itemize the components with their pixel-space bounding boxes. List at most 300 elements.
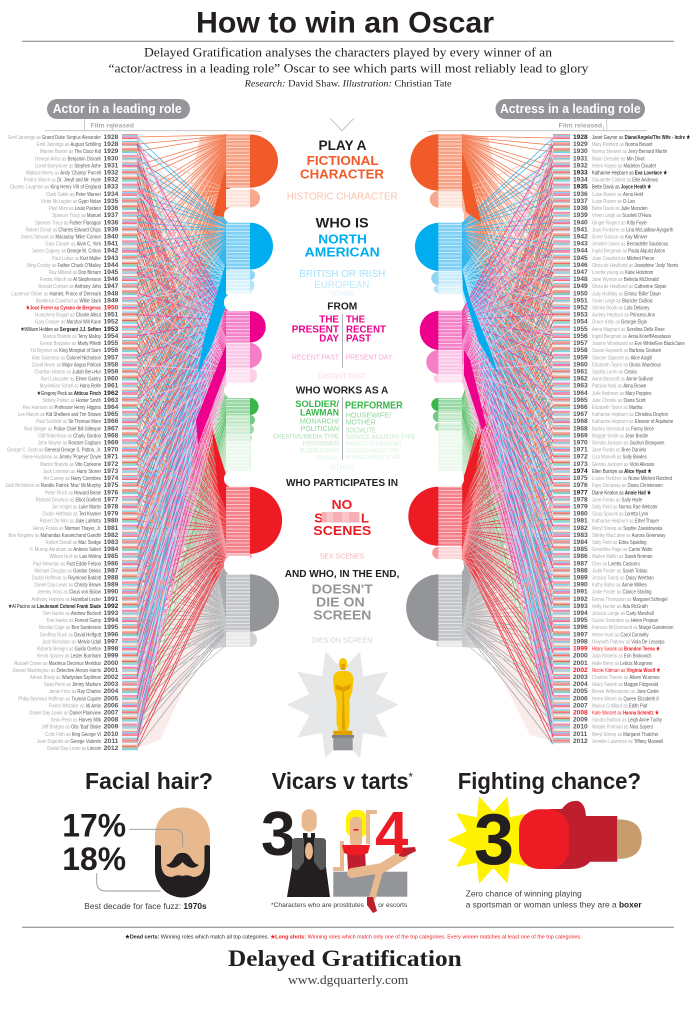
actor years [104,134,119,752]
actor years: 1992 [104,603,119,610]
actor names: ★Gregory Peck as Atticus Finch [37,390,101,397]
actor names: Spencer Tracy as Father Flanagan [35,220,101,227]
actor names: Kevin Spacey as Lester Burnham [37,653,101,660]
category: era [292,302,392,381]
actress names: Norma Shearer as Jerry Bernard Martin [592,149,667,155]
category: north american: WHO IS [316,216,369,231]
actor names: Cliff Robertson as Charly Gordon [38,433,101,440]
actress years: 2001 [573,660,588,667]
actress names: Emma Thompson as Margaret Schlegel [592,596,667,603]
actor years: 1974 [104,475,119,482]
actress years: 1983 [573,532,588,539]
category: era: THE [346,315,365,326]
category: occupation: HOUSEWIFE/ [346,411,392,420]
actress names: Luise Rainer as O-Lan [592,198,635,205]
actress years: 2008 [573,710,588,716]
actor names: Warner Baxter as The Cisco Kid [40,149,101,155]
actress names: Ellen Burstyn as Alice Hyatt ★ [592,468,652,475]
actor years: 1940 [104,234,119,240]
actress names: Simone Signoret as Alice Aisgill [592,355,652,362]
actor names: Spencer Tracy as Manuel [52,213,101,219]
actress years: 1936 [573,191,588,198]
actress names: Cher as Loretta Castorini [592,561,640,568]
actress names: Kate Winslet as Hanna Schmitz ★ [592,710,659,717]
actor names: Jon Voight as Luke Martin [52,504,101,511]
icon: yellow burst [447,796,539,884]
actor names: Rod Steiger as Police Chief Bill Gillespie [24,426,101,433]
actress years: 1980 [573,511,588,518]
actress years: 1969 [573,432,588,439]
category: north american: OTHER [331,292,355,298]
actress years: 1947 [573,269,588,276]
actress names: Natalie Portman as Nina Sayers [592,724,653,731]
actor years: 1971 [104,454,119,461]
panel: vicars v tarts [261,768,416,913]
category: north american: AMERICAN [305,244,380,259]
category: fictional character: HISTORIC CHARACTER [287,192,398,203]
actress names: Ingrid Bergman as Paula Alquist Anton [592,248,665,255]
actress names [592,134,690,745]
category: survival: DIES ON SCREEN [312,636,372,645]
masthead logo: Delayed Gratification [228,946,462,971]
actor names: Wallace Beery as Andy 'Champ' Purcell [26,170,101,177]
actor names: Victor McLaglen as Gypo Nolan [41,198,101,205]
actor years: 1989 [104,582,119,589]
category: fictional character: PLAY A [318,138,367,153]
actress years: 1981 [573,518,588,525]
actor years: 1935 [104,198,119,205]
actor names: F. Murray Abraham as Antonio Salieri [30,547,101,553]
right alluvial flows [461,134,570,744]
actress years: 2004 [573,681,588,688]
actor names: Rex Harrison as Professor Henry Higgins [23,404,101,411]
actor names: Jack Nicholson as Randle Patrick 'Mac' McMurphy [5,483,101,489]
actor years: 1932 [104,177,119,184]
actress years: 1958 [573,347,588,354]
actor names: Lionel Barrymore as Stephen Ashe [35,163,101,170]
actor years: 1997 [104,638,119,646]
actress years: 1943 [573,241,588,248]
actor years: 1994 [104,617,119,624]
panel: fighting chance: Fighting chance? [458,768,641,794]
actress names: Julia Roberts as Erin Brokovich [592,653,652,660]
actor years: 1978 [104,504,119,510]
chevron [330,118,354,131]
actress years: 1986 [573,553,588,560]
category: survival: SCREEN [313,608,371,623]
actress names: Bette Davis as Julie Marsden [592,206,648,212]
actress years: 1992 [573,596,588,603]
actress names: Marie Dressler as Min Divot [592,156,645,163]
actress names: Shirley MacLaine as Aurora Greenway [592,532,666,539]
actor years: 1947 [104,283,119,290]
actress years: 1971 [573,447,588,454]
actor names: Sean Penn as Harvey Milk [50,717,101,724]
actress names: Olivia de Havilland as Catherine Sloper [592,284,667,290]
actor names: Jeremy Irons as Claus von Bülow [37,589,101,596]
actor years: 1964 [104,404,119,411]
panel: vicars v tarts: * [409,770,413,784]
icon: bearded head [155,808,210,897]
actress names: Frances McDormand as Marge Gunderson [592,625,674,631]
actor years: 1958 [104,361,119,368]
actor names: Daniel Day-Lewis as Daniel Plainview [29,710,101,717]
actor years: 1975 [104,482,119,489]
actor names: Jack Lemmon as Harry Stoner [43,468,101,475]
actor years: 1959 [104,368,119,376]
category: no sex scenes: L [361,510,369,525]
actor years: 1999 [104,653,119,660]
actor years: 1953 [104,326,119,333]
film released labels and flow arrows: Film released [559,123,602,130]
left white gaps between categories [224,132,300,662]
actress names: Shirley Booth as Lola Delaney [592,305,650,312]
actor names: Ray Milland as Don Birnam [49,269,101,276]
actress names: Mary Pickford as Norma Besant [592,142,653,148]
left heading pill: Actor in a leading role [53,102,182,116]
actor years: 2008 [104,717,119,724]
actress years: 1964 [573,390,588,397]
category: north american [299,216,385,298]
actress names: Bette Davis as Joyce Heath ★ [592,184,651,191]
actor years: 2007 [104,710,119,716]
panel: facial hair: 17% [62,808,126,844]
category: occupation: CRIMINAL [315,455,339,461]
actress names: Vivien Leigh as Scarlett O'Hara [592,213,651,219]
actress years: 1959 [573,354,588,361]
actor years: 1991 [104,596,119,603]
actor names: Maximilian Schell as Hans Rolfe [40,383,101,390]
actress years: 1940 [573,219,588,226]
actor years: 1998 [104,646,119,653]
actress names: Nicole Kidman as Virginia Woolf ★ [592,667,661,674]
actress names: Jessica Tandy as Daisy Werthan [592,575,654,582]
actress names: Halle Berry as Leticia Musgrove [592,660,653,667]
panel: vicars v tarts: 3 [261,800,295,869]
actor years: 1943 [104,255,119,262]
actress years: 1985 [573,546,588,553]
actor years: 1984 [104,546,119,553]
actor names: Denzel Washington as Detective Alonzo Harris [13,667,101,674]
actor years: 1965 [104,411,119,418]
actress names: Hilary Swank as Maggie Fitzgerald [592,682,658,688]
actor names: Ben Kingsley as Mahandas Karamchand Gandhi [9,532,101,539]
actress years: 1996 [573,624,588,631]
panel: vicars v tarts: Vicars v tarts [272,768,416,794]
left alluvial flows [122,134,230,751]
actress years: 1977 [573,489,588,496]
actor names: Bing Crosby as Father Chuck O'Malley [27,262,101,269]
actress years: 1975 [573,475,588,482]
intro text: Research: David Shaw. Illustration: Christian Tate [244,79,452,89]
actress years: 1979 [573,504,588,510]
actor names: Fredric March as Al Stephenson [40,277,101,283]
actor names: Jeff Bridges as Otis 'Bad' Blake [42,724,101,731]
actor years: 1996 [104,631,119,638]
actress names: Helen Hayes as Madelon Claudet [592,163,656,170]
category: occupation: SOCIALITE [346,427,376,434]
actor years: 1932 [104,170,119,176]
actor names: Gary Cooper as Alvin C. York [45,241,101,248]
actress names: Marlee Matlin as Sarah Norman [592,554,653,560]
actress years: 1935 [573,184,588,191]
actor years: 1979 [104,511,119,518]
actress years: 2007 [573,702,588,709]
actor years: 1963 [104,397,119,404]
actress years: 2011 [573,731,588,738]
actor names: Art Carney as Harry Coombes [44,475,101,482]
category: no sex scenes [286,477,398,560]
actress names: Katharine Hepburn as Eleanor of Aquitaine [592,419,673,425]
actor years: 1929 [104,148,119,155]
category: no sex scenes: S [314,510,323,525]
actress names: Luise Rainer as Anna Held [592,191,643,198]
actress names: Charlize Theron as Aileen Wuornos [592,674,660,681]
actor names: Forest Whitaker as Idi Amin [49,703,101,710]
intro text: Delayed Gratification analyses the characters played by every winner of an [144,46,553,60]
actor names: Dustin Hoffman as Ted Kramer [42,511,101,518]
panel: facial hair: Facial hair? [85,768,213,794]
actress years: 1982 [573,525,588,532]
actor names: Tom Hanks as Forrest Gump [46,618,101,624]
actor years: 1939 [104,226,119,233]
actor names: James Stewart as Macaulay 'Mike' Connor [20,234,101,241]
right category bands [438,134,462,648]
actor years: 1990 [104,589,119,596]
category: fictional character: CHARACTER [300,166,385,181]
actress years: 1987 [573,560,588,567]
actor years: 1987 [104,567,119,574]
actress names: Elizabeth Taylor as Gloria Wandrous [592,362,661,369]
actress years: 1942 [573,234,588,240]
right white gaps between categories [390,132,464,662]
actress names: Joan Crawford as Mildred Pierce [592,255,654,262]
actor names: Daniel Day-Lewis as Christy Brown [34,582,101,589]
actor years: 1945 [104,269,119,276]
actress years: 1984 [573,539,588,546]
actor names: Jack Nicholson as Melvin Udall [42,639,101,646]
actor years: 1995 [104,624,119,631]
actor names: Paul Muni as Louis Pasteur [49,206,101,212]
actress years: 1967 [573,411,588,418]
actress names: Reese Witherspoon as June Carter [592,689,659,695]
actor years: 1951 [104,312,119,319]
actress names: Vivien Leigh as Blanche DuBois [592,298,653,305]
actor names: Clark Gable as Peter Warner [46,191,101,198]
category: survival: DIE ON [316,594,365,609]
actor names: Ronald Colman as Anthony John [38,284,101,290]
actor names: Emil Jannings as Grand Duke Sergius Alexander [8,134,101,141]
actress years: 1968 [573,418,588,425]
category: era: RECENT PAST [292,353,339,362]
actress years: 1944 [573,248,588,255]
actress years: 1946 [573,262,588,269]
actor years: 1928 [104,141,119,148]
actress names: Joan Fontaine as Lina McLaidlaw Aysgarth [592,227,674,234]
actor years: 2004 [104,688,119,695]
category: survival: DOESN'T [312,581,373,596]
actor names: Broderick Crawford as Willie Stark [36,298,101,305]
actor years: 2005 [104,695,119,702]
actress years: 1989 [573,574,588,582]
panel: fighting chance: a sportsman or woman unless they are a boxer [466,900,642,910]
actor names: William Hurt as Luis Molina [49,554,101,560]
actress years: 1972 [573,454,588,461]
category: occupation: SOLDIER/ [295,399,340,409]
actress names: Claudette Colbert as Ellie Andrews [592,177,658,184]
category: occupation: WHO WORKS AS A [296,384,389,396]
left category bands [226,134,250,648]
icon: vicar [287,809,330,897]
category: occupation: PROSTITUTE/ESCORT [346,442,403,448]
actress names: Jessica Lange as Carly Marshall [592,610,654,617]
actress years: 2003 [573,674,588,681]
category: era: FROM [327,302,357,313]
actor names: Colin Firth as King George VI [45,731,101,738]
actress years: 1950 [573,290,588,297]
actress names: Sandra Bullock as Leigh Anne Tuohy [592,717,662,724]
category: no sex scenes: SEX SCENES [320,551,364,560]
actor names: Marlon Brando as Vito Corleone [40,461,101,468]
actress years: 2010 [573,724,588,731]
category: occupation: PERFORMER [303,441,340,447]
panel: fighting chance: 3 [474,800,514,880]
actor names: George C. Scott as General George S. Patton, Jr. [7,447,101,454]
category: occupation: BUSINESSMAN [300,448,339,454]
actor years: 1928 [104,134,119,141]
actor years: 1933 [104,184,119,191]
actor years: 1941 [104,241,119,248]
intro text: “actor/actress in a leading role” Oscar to see which parts will most reliably lead to glory [108,61,589,75]
actress years: 1929 [573,141,588,148]
actress names: Katharine Hepburn as Ethel Thayer [592,518,659,525]
left category half circles [250,134,282,647]
actor names: ★José Ferrer as Cyrano de Bergerac [26,305,101,312]
actress years: 1978 [573,496,588,503]
actress years: 1957 [573,340,588,347]
actor names: Fredric March as Dr. Jekyll and Mr. Hyde [24,177,101,184]
actor years: 1973 [104,468,119,475]
category: no sex scenes: WHO PARTICIPATES IN [286,477,398,489]
actress years: 1991 [573,589,588,596]
actress years: 1934 [573,177,588,184]
actor years: 1966 [104,418,119,425]
category: occupation: POLITICIAN [301,424,339,433]
actor names: Russell Crowe as Maximus Decimus Meridius [14,660,101,667]
actress years: 1938 [573,205,588,212]
icon: oscar statuette [332,658,354,750]
actor names: Burt Lancaster as Elmer Gantry [41,376,101,383]
actress names: Glenda Jackson as Vicki Allessio [592,461,654,468]
actor names: Charles Laughton as King Henry VIII of England [10,184,101,191]
actress years: 1973 [573,461,588,468]
actress years: 1968 [573,425,588,432]
actress names: Liza Minnelli as Sally Bowles [592,454,647,461]
actress names: Helen Mirren as Queen Elizabeth II [592,696,659,703]
actress years: 1954 [573,319,588,326]
actor years: 2012 [104,745,119,752]
actress years: 1932 [573,162,588,169]
actor years: 1930 [104,155,119,162]
actor names: Paul Newman as Fast Eddie Felson [33,561,101,568]
actress years: 1961 [573,368,588,376]
panel: facial hair: Best decade for face fuzz: 1970s [84,901,207,911]
actor years: 2006 [104,702,119,709]
actor names: Jean Dujardin as George Valentin [37,738,101,745]
actor names: Sean Penn as Jimmy Markum [44,682,101,688]
actress years: 1941 [573,226,588,233]
category: fictional character [287,138,398,203]
actor names [5,134,101,752]
actress names: Jodie Foster as Clarice Starling [592,589,652,596]
actress years [573,134,588,745]
actress years: 1995 [573,617,588,624]
actor names: Anthony Hopkins as Hannibal Lecter [32,596,101,603]
category: era: DISTANT PAST [319,372,366,381]
category: north american: NORTH [318,231,367,246]
category: survival: AND WHO, IN THE END, [285,568,399,580]
actress names: Jane Fonda as Bree Daniels [592,447,646,454]
actress names: Anna Magnani as Serafina Delle Rose [592,326,665,333]
actress names: Elizabeth Taylor as Martha [592,404,643,411]
category: north american: BRITISH OR IRISH [299,269,385,280]
actor years: 1970 [104,447,119,454]
actress names: Susan Hayward as Barbara Graham [592,348,661,354]
actress names: Gwyneth Paltrow as Viola De Lesseps [592,639,665,646]
actor years: 1960 [104,376,119,383]
actor years: 1962 [104,390,119,397]
actress names: Jane Wyman as Belinda McDonald [592,277,659,283]
actress years: 1956 [573,333,588,340]
actor names: Charlton Heston as Judah Ben-Hur [34,369,101,376]
website: www.dgquarterly.com [288,972,408,987]
actor years: 1952 [104,319,119,326]
actress names: Katharine Hepburn as Eva Lovelace ★ [592,170,667,177]
category: era: RECENT [346,324,386,335]
actress names: Sophia Loren as Cesira [592,369,637,376]
actress names: Holly Hunter as Ada McGrath [592,603,648,610]
actor names: Peter Finch as Howard Beale [45,490,101,497]
actor years: 1955 [104,340,119,347]
actress names: Sissy Spacek as Loretta Lynn [592,511,648,518]
actor years: 1983 [104,539,119,546]
actor years: 2011 [104,738,119,745]
actor years: 1950 [104,304,119,312]
actor years: 1985 [104,553,119,560]
actor names: Humphrey Bogart as Charlie Allnut [35,312,101,319]
actress names: Susan Sarandon as Helen Prejean [592,618,658,624]
actress names: Olivia de Havilland as Josephine 'Jody' Norris [592,262,679,269]
actor years: 1982 [104,532,119,539]
category: era: PRESENT [292,324,339,335]
actor years: 1967 [104,425,119,432]
actor years: 1977 [104,496,119,503]
actor names: Emil Jannings as August Schilling [37,142,101,148]
actress years: 1952 [573,304,588,312]
actor names: Robert De Niro as Jake LaMotta [40,518,101,525]
actress years: 2012 [573,738,588,745]
footnote: ★Dead certs: Winning roles which match all top categories. ★Long shots: Winning roles which match only one of the top categories. Every winner matches at least one of the top categories. [124,935,582,941]
actress names: Faye Dunaway as Diana Christensen [592,483,663,489]
category: occupation: CREATIVE/MEDIA TYPE [346,448,400,454]
actor names: Sidney Poitier as Homer Smith [43,397,101,404]
category: occupation: MOTHER [346,417,376,426]
actor years: 1988 [104,574,119,582]
actor names: ★Al Pacino as Lieutenant Colonel Frank Slade [8,603,101,610]
actor names: Roberto Benigni as Guido Orefice [37,646,101,653]
actor names: Lee Marvin as Kid Shelleen and Tim Strawn [18,412,101,418]
actress years: 2005 [573,688,588,695]
